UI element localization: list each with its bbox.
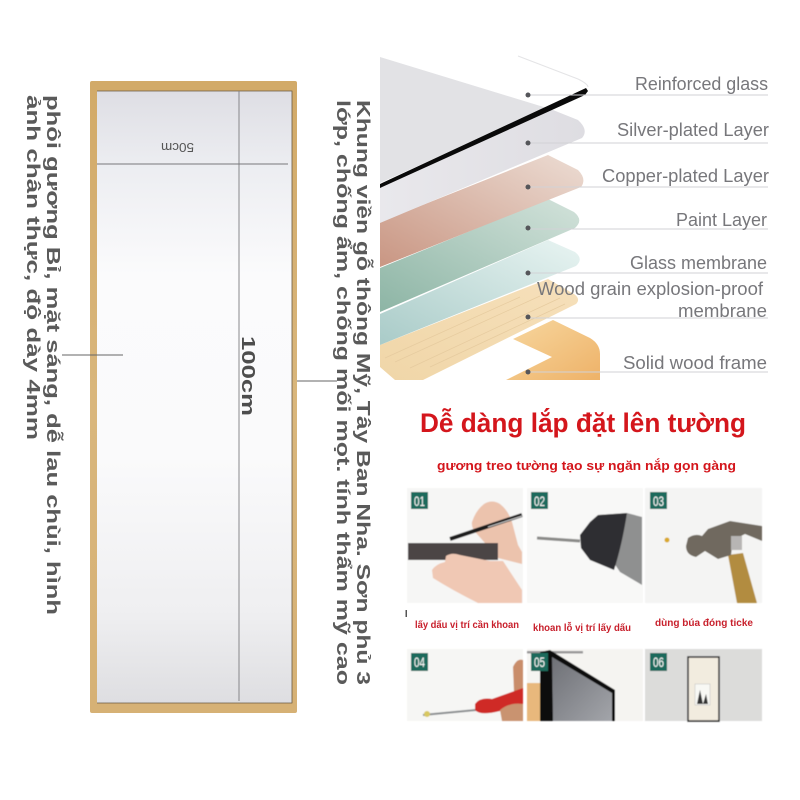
mirror glass [97,91,292,703]
layer labels: Paint Layer [676,210,767,230]
step badge 06: 06 [653,654,664,670]
caption step 3: dùng búa đóng ticke [655,618,753,629]
text block: glass description [23,95,64,615]
panel: step 5 photo [527,649,643,721]
step badge 01: 01 [414,493,425,509]
step badge 02: 02 [534,493,545,509]
metal ruler [408,543,498,560]
layer labels: Copper-plated Layer [602,166,769,186]
hammer head [686,521,762,559]
silver-plated layer [380,108,585,223]
drill silver collar [612,513,642,585]
panel: step 2 photo [527,488,643,603]
panel: step 6 photo [645,649,762,721]
heading: Dễ dàng lắp đặt lên tường [420,407,746,438]
step badge 05: 05 [534,654,545,670]
caption step 2: khoan lỗ vị trí lấy dấu [533,621,631,634]
step badge 03: 03 [653,493,664,509]
reflected picture [695,684,710,705]
drill chuck [580,513,627,570]
height dimension line [238,91,240,701]
text block: glass description: ảnh chân thực, độ dày 4mm [23,95,44,440]
leader line to glass [62,354,123,356]
wall anchor [664,538,670,542]
mirror being hung [540,650,615,721]
text block: glass description: phôi gương Bỉ, mặt sáng, dễ lau chùi, hình [43,95,64,615]
panel: step 1 photo [407,488,523,603]
leader line to frame [297,380,337,382]
pen [450,515,522,539]
copper-plated layer [380,155,583,267]
mirror wooden frame [90,81,297,713]
layer labels: Solid wood frame [623,353,767,373]
lower hand [432,554,522,603]
width dimension line [97,163,288,165]
layer labels: Silver-plated Layer [617,120,769,140]
step badge 04: 04 [414,654,425,670]
panel: mirror diagram [62,81,337,713]
panel: step 3 photo [645,488,762,603]
layer labels [537,74,769,373]
panel: mirror layers diagram [380,56,769,380]
text block: frame description [333,100,374,685]
glass membrane layer [380,240,580,345]
hammer handle [728,553,757,603]
width label 50cm: 50cm [161,140,194,155]
upper hand [472,502,522,564]
text block: frame description: Khung viền gỗ thông Mỹ, Tây Ban Nha. Sơn phủ 3 [353,100,374,685]
callout lines and dots [526,92,768,374]
solid wood frame layer [506,320,600,380]
stray mark [406,610,407,617]
caption step 1: lấy dấu vị trí cần khoan [415,619,519,631]
drill bit [537,538,580,541]
wooden door [527,683,541,721]
subheading: gương treo tường tạo sự ngăn nắp gọn gàng [437,458,736,473]
fingers [500,704,523,721]
text block: frame description: lớp, chống ẩm, chống mối mọt. tính thẩm mỹ cao [333,100,354,685]
finished mirror [688,657,719,721]
ceiling bar [527,651,583,654]
mirror inner shadow edges [97,91,292,703]
height label 100cm: 100cm [238,336,258,416]
layer labels: Reinforced glass [635,74,768,94]
panel: step 4 photo [407,649,523,721]
layer labels: Glass membrane [630,253,767,273]
reinforced glass layer [380,56,588,186]
wood grain membrane layer [380,279,578,380]
paint layer [380,199,579,312]
screwdriver handle [475,688,523,713]
glass black edge [380,88,588,188]
screwdriver shaft [423,710,476,715]
layer labels: Wood grain explosion-proof [537,279,764,299]
hand [513,660,523,695]
layer labels: membrane [678,301,767,321]
